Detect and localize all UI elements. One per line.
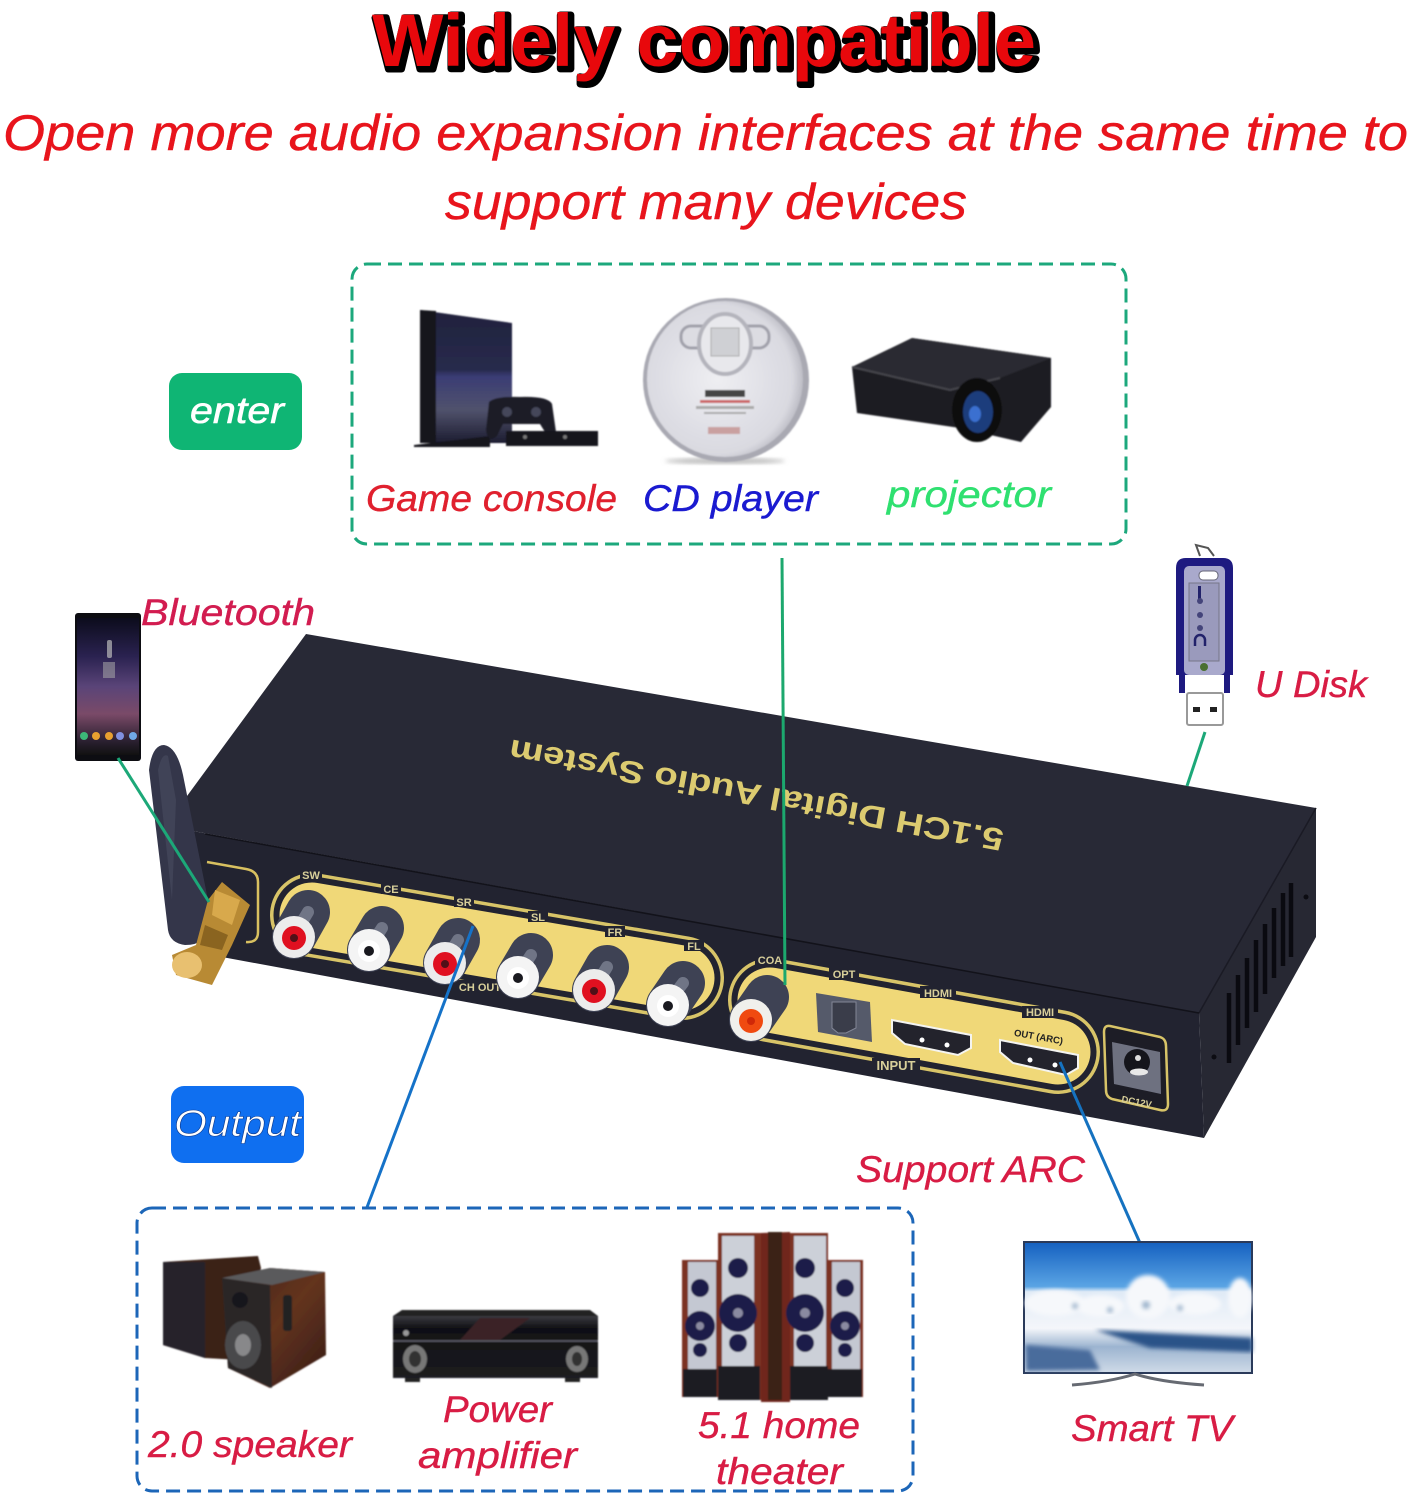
antenna [149, 745, 250, 985]
connector line: U disk to device [1187, 732, 1205, 786]
RCA jack: SW [273, 912, 315, 958]
connector line: input box to coaxial [782, 558, 785, 985]
connector line: 5.1 out to output box [366, 926, 473, 1210]
5.1 output panel: FR [608, 927, 622, 939]
printed product name: 5.1CH Digital Audio System [506, 732, 1006, 858]
connector line: phone to antenna [118, 758, 209, 902]
badge: enter: enter [190, 390, 286, 431]
5.1 output panel: SR [456, 897, 472, 909]
label: Bluetooth: Bluetooth [141, 592, 315, 633]
5.1 output panel: SL [531, 912, 545, 924]
badge: enter [169, 373, 302, 450]
antenna port outline [207, 862, 258, 942]
input panel: COA [758, 955, 782, 967]
coaxial jack [730, 997, 772, 1041]
5.1 output panel: CE [383, 884, 399, 896]
panel: input devices [352, 264, 1126, 544]
icon: smart TV [1024, 1242, 1252, 1385]
input panel [730, 953, 1078, 1075]
icon: smartphone [75, 613, 141, 761]
label: Smart TV: Smart TV [1071, 1408, 1236, 1449]
5.1 output panel: FL [687, 941, 701, 953]
label: 5.1 home theater: theater [716, 1451, 845, 1492]
RCA jack: FL [647, 983, 689, 1026]
label: projector: projector [886, 474, 1053, 515]
icon: 2.0 speakers [163, 1256, 326, 1388]
label: CD player: CD player [643, 478, 820, 519]
text: OUT (ARC): OUT (ARC) [1013, 1028, 1064, 1047]
label: Power amplifier: amplifier [418, 1435, 579, 1476]
subtitle: support many devices [445, 174, 967, 230]
input panel: HDMI [924, 988, 952, 1000]
RCA jack: FR [573, 967, 615, 1011]
device right side with vents [1199, 808, 1316, 1138]
icon: USB disk [1176, 545, 1233, 725]
subtitle [3, 105, 1408, 230]
label: game console: Game console [366, 478, 617, 519]
connector line: HDMI ARC to TV [1060, 1062, 1140, 1243]
HDMI output port [1000, 1040, 1078, 1075]
icon: 5.1 home theater [682, 1232, 863, 1402]
device top face [165, 634, 1316, 1013]
label: Power amplifier: Power [443, 1389, 554, 1430]
input panel: OPT [833, 969, 856, 981]
device front face [165, 826, 1204, 1138]
RCA jack: SL [497, 955, 539, 998]
subtitle: Open more audio expansion interfaces at the same time to [3, 105, 1408, 161]
icon: power amplifier [393, 1310, 598, 1382]
device: 5.1CH digital audio system [165, 634, 1316, 1138]
input panel: HDMI [1026, 1007, 1054, 1019]
5.1 output panel: CH OUT [459, 982, 501, 994]
5.1 output panel: SW [302, 870, 320, 882]
5.1 output panel [273, 869, 704, 1026]
RCA jack: CE [348, 928, 390, 971]
HDMI input port [892, 1020, 971, 1055]
icon: CD player [643, 298, 809, 464]
icon: projector [852, 338, 1051, 442]
label: 5.1 home theater [698, 1405, 860, 1492]
label: U Disk: U Disk [1255, 664, 1370, 705]
badge: Output: Output [174, 1103, 303, 1144]
RCA jack: SR [424, 940, 466, 984]
optical port [816, 993, 872, 1042]
label: Power amplifier [418, 1389, 579, 1476]
DC power port [1104, 1026, 1168, 1111]
icon: game console [414, 310, 598, 447]
title: Widely compatible [375, 2, 1039, 85]
panel: output devices [137, 1208, 913, 1492]
badge: Output [171, 1086, 304, 1163]
label: 2.0 speaker: 2.0 speaker [147, 1424, 354, 1465]
label: Support ARC: Support ARC [856, 1149, 1085, 1190]
DC power port: DC12V [1120, 1094, 1153, 1111]
title: Widely compatible [372, 0, 1036, 82]
label: 5.1 home theater: 5.1 home [698, 1405, 860, 1446]
input panel: INPUT [876, 1058, 916, 1073]
